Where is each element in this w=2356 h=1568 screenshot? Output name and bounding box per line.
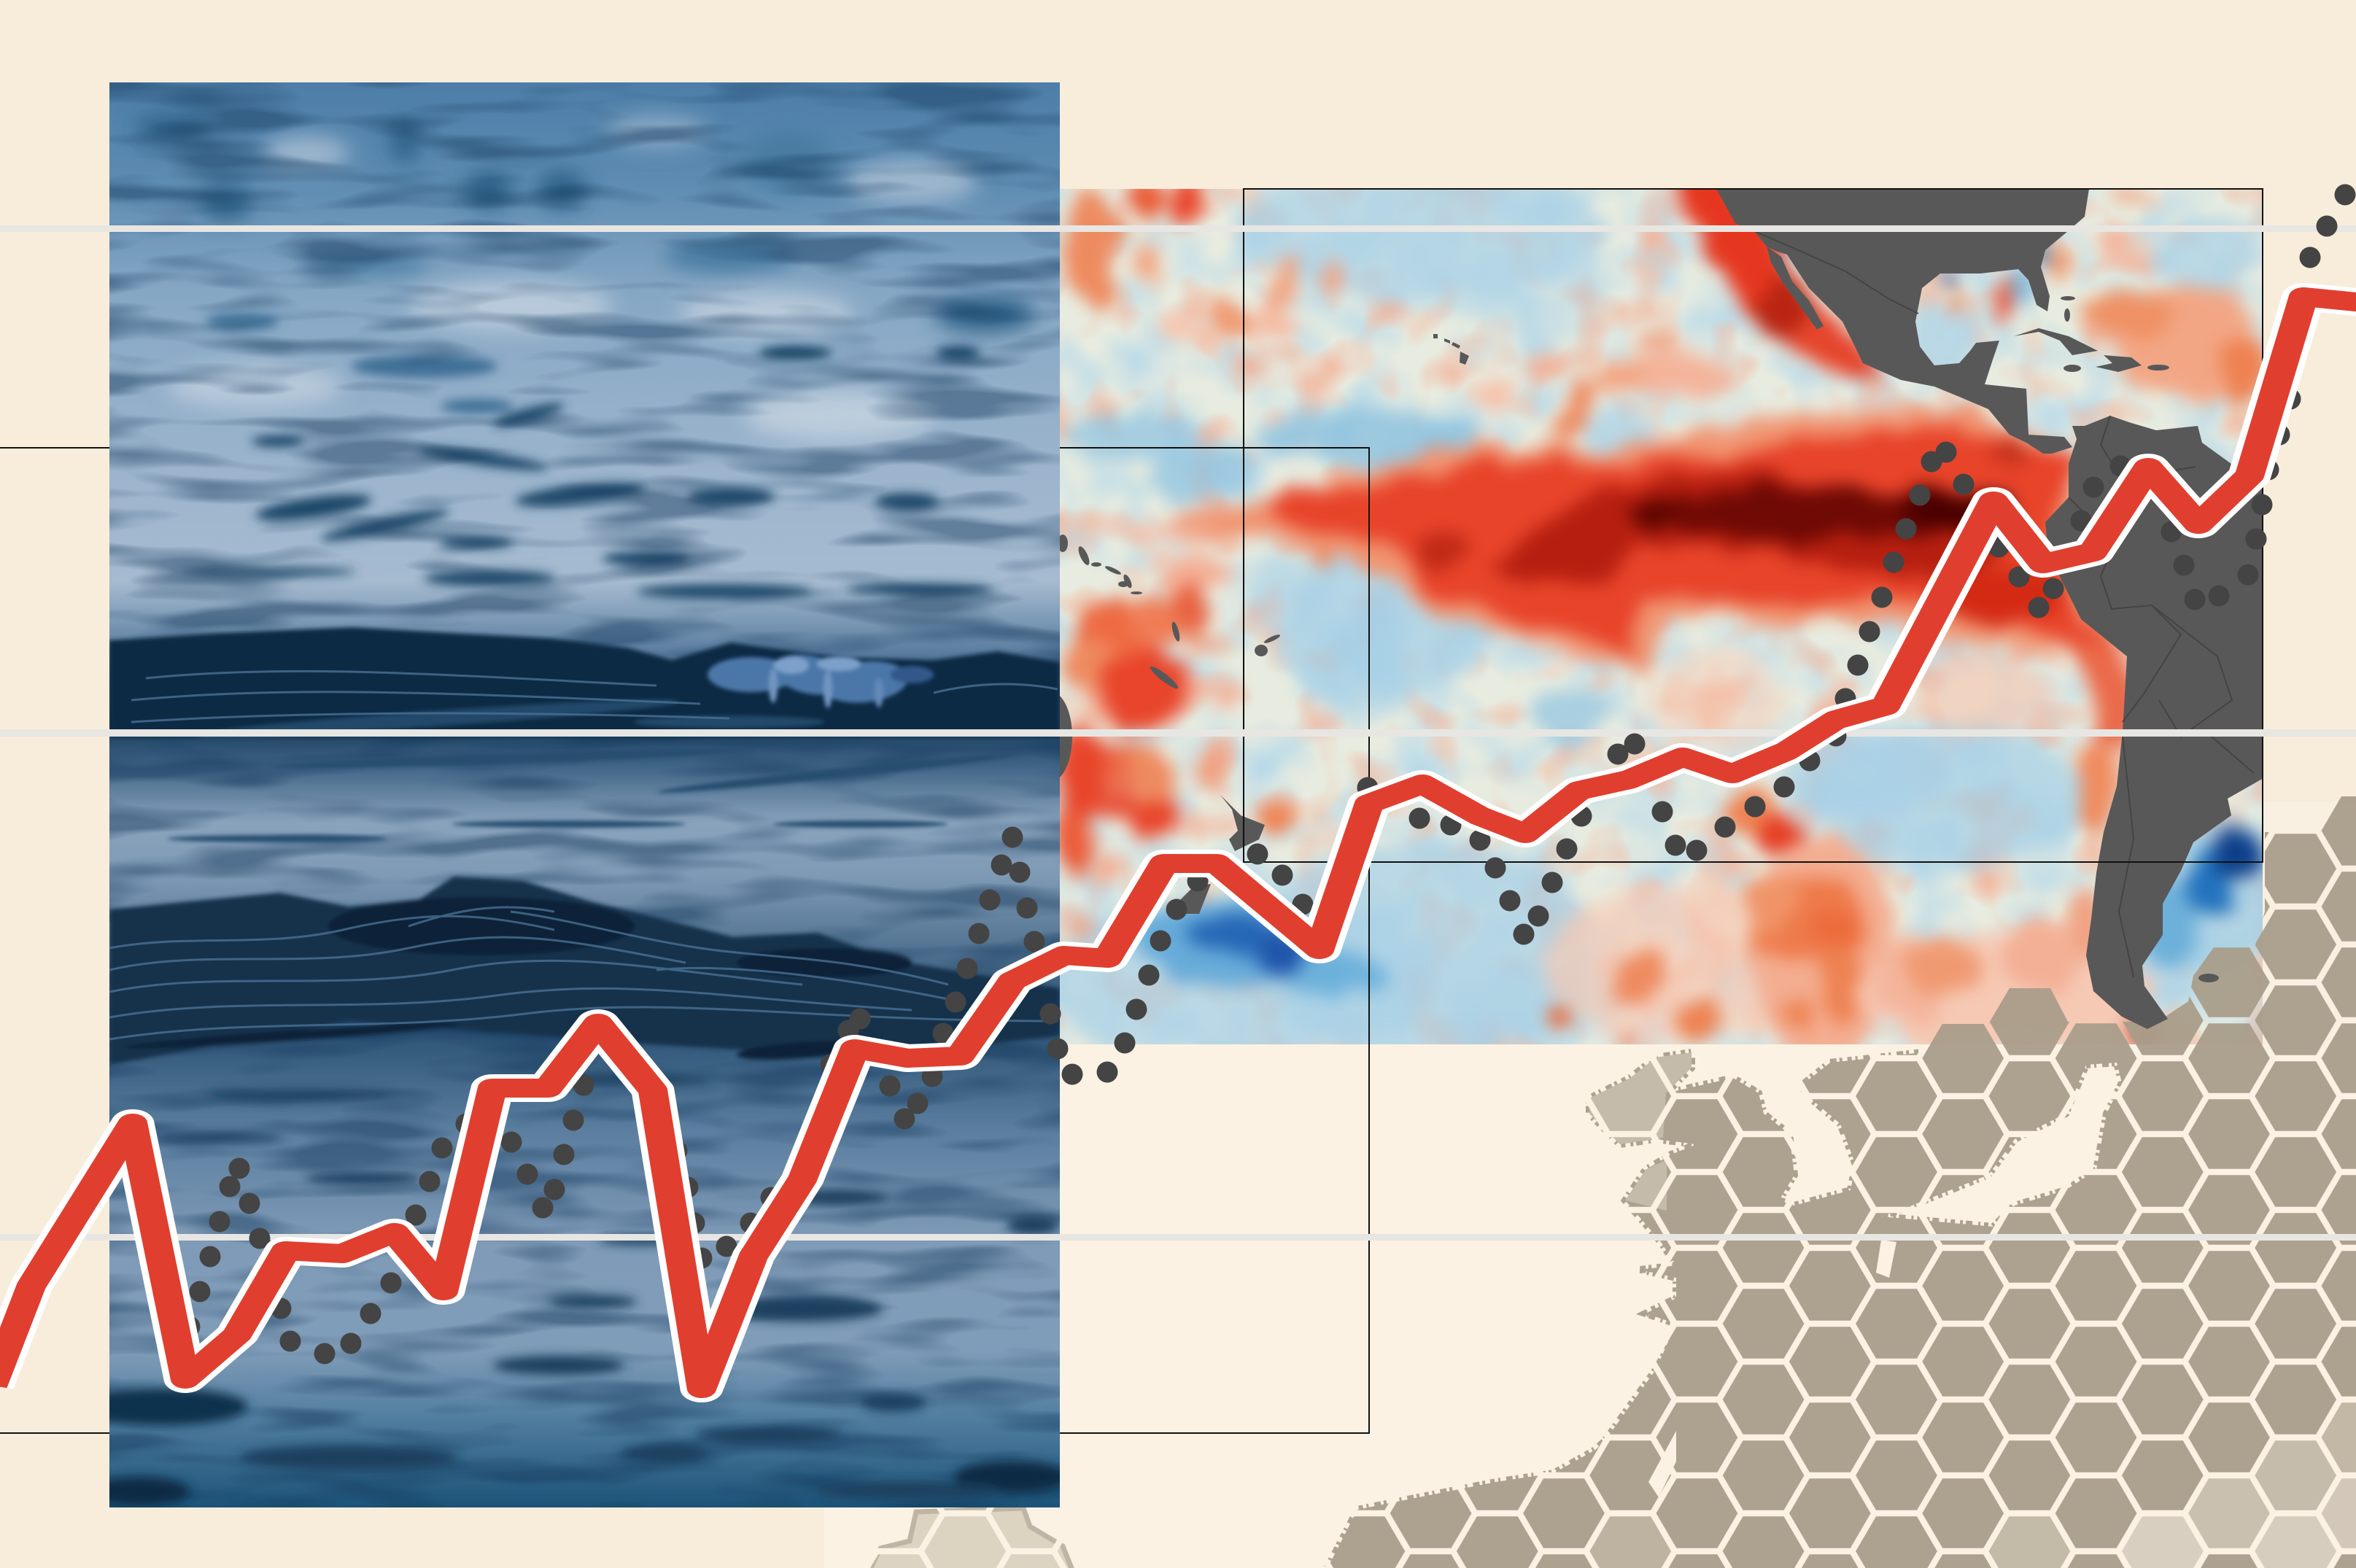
southwest Pacific red patches [1056,176,2164,1044]
fine ripple lines on the waves [109,671,1058,1039]
first breaking wave [109,627,1060,742]
southern faded island [867,1508,1074,1568]
Baja coast warm band [1704,182,1783,303]
photo of dark blue ocean waves [73,82,1071,1507]
Peru coast warm band [2079,627,2115,729]
country borders [1754,231,2254,977]
North and Central America [1716,189,2089,454]
pale horizontal gridlines [0,225,2356,1241]
thin outline frame behind the photo [0,448,1369,1433]
second large dark wave [109,877,1060,1065]
dotted dark line series [190,195,2345,1354]
equatorial warm tongue [1196,408,2086,678]
thin outline frame around the map [1244,189,2263,862]
mid water streaks [181,313,992,599]
deep blue patches [1134,897,1324,985]
hexagon tile map of East Asia [867,796,2356,1568]
sea temperature anomaly heatmap [1036,168,2292,1057]
South America [2045,416,2263,1029]
land mass [1328,796,2356,1568]
Hawaii [1433,334,1469,365]
foam on first wave [708,648,934,708]
warm patches [1063,186,2269,1046]
lower water streaks [73,1074,1071,1506]
lighter northern peninsulas [1589,1052,1692,1211]
Pacific islands [1058,535,1281,691]
red line series with white outline [0,297,2356,1389]
blurred far water [134,115,1036,440]
Baja California [1767,247,1824,330]
New Zealand [1178,795,1265,914]
streaks below first wave [168,745,1020,842]
dark continents and islands on the map [1028,189,2263,1029]
Falkland Islands [2198,974,2219,982]
faded hexagons [1586,1400,2356,1568]
pale warm patches [1061,193,2258,1057]
Caribbean islands [2014,328,2142,372]
Australia edge [1028,691,1072,782]
blue patches [1036,168,2292,1057]
jagged coastline edge [1328,1052,2122,1568]
